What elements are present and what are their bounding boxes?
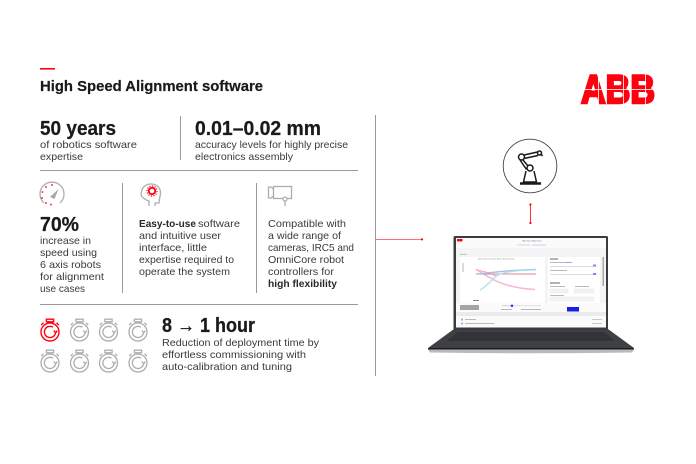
stat: accuracy: 0.01–0.02 mm (195, 118, 321, 140)
text: easy to use: interface, little (139, 242, 207, 254)
stat: 70%: use cases (40, 283, 85, 295)
text: compatibility: a wide range of (268, 230, 341, 242)
text: easy to use: and intuitive user (139, 230, 222, 242)
stat: 50 years: expertise (40, 151, 83, 163)
stat: accuracy (195, 118, 348, 163)
text: easy to use: software (198, 218, 240, 230)
line chart: Series Series Series Series Series Series (478, 258, 515, 260)
laptop (428, 236, 634, 353)
icon: robot in circle (503, 139, 557, 193)
toolbar buttons (460, 304, 579, 312)
title: High Speed Alignment software (40, 79, 263, 95)
icon: head with gear (141, 184, 160, 206)
stat: 8 to 1 hour: Reduction of deployment time by (162, 337, 320, 349)
icon: camera (268, 186, 292, 206)
laptop screen: Results (460, 253, 467, 256)
laptop screen: High Speed Alignment (522, 240, 542, 242)
settings panel (548, 257, 600, 303)
text: compatibility: OmniCore robot (268, 254, 344, 266)
icon: speedometer (40, 182, 64, 206)
text: easy to use: operate the system (139, 266, 230, 278)
text: compatibility: cameras, IRC5 and (268, 242, 354, 254)
stat: 70%: speed using (40, 247, 97, 259)
text: compatibility: Compatible with (268, 218, 346, 230)
logo: ABB: ABB (581, 68, 655, 112)
stat: 70%: increase in (40, 235, 91, 247)
stat: 8 to 1 hour: effortless commissioning with (162, 349, 306, 361)
text: compatibility (268, 218, 354, 290)
text: compatibility: high flexibility (268, 278, 337, 290)
icons: grey stopwatches (41, 319, 147, 372)
stat: 70%: for alignment (40, 271, 104, 283)
stat: accuracy: accuracy levels for highly precise (195, 139, 348, 151)
stat: 50 years: 50 years (40, 118, 116, 140)
stat: 8 to 1 hour: auto-calibration and tuning (162, 361, 292, 373)
text: easy to use: Easy-to-use (139, 218, 196, 230)
log panel (456, 312, 606, 328)
stat: 50 years (40, 118, 137, 163)
arrow: to laptop (376, 238, 423, 240)
laptop base (428, 329, 634, 353)
stat: 70%: 6 axis robots (40, 259, 101, 271)
line chart (460, 257, 545, 303)
stat: 8 to 1 hour: 8 → 1 hour (162, 315, 255, 337)
text: easy to use: expertise required to (139, 254, 234, 266)
icon: red stopwatch (41, 319, 59, 341)
stat: 8 to 1 hour (162, 315, 320, 373)
arrow: robot to laptop (529, 203, 532, 224)
text: easy to use (139, 218, 240, 278)
stat: 70% (40, 214, 104, 295)
laptop screen (454, 236, 608, 330)
stat: 50 years: of robotics software (40, 139, 137, 151)
stat: 70%: 70% (40, 214, 79, 236)
text: compatibility: controllers for (268, 266, 335, 278)
stat: accuracy: electronics assembly (195, 151, 294, 163)
